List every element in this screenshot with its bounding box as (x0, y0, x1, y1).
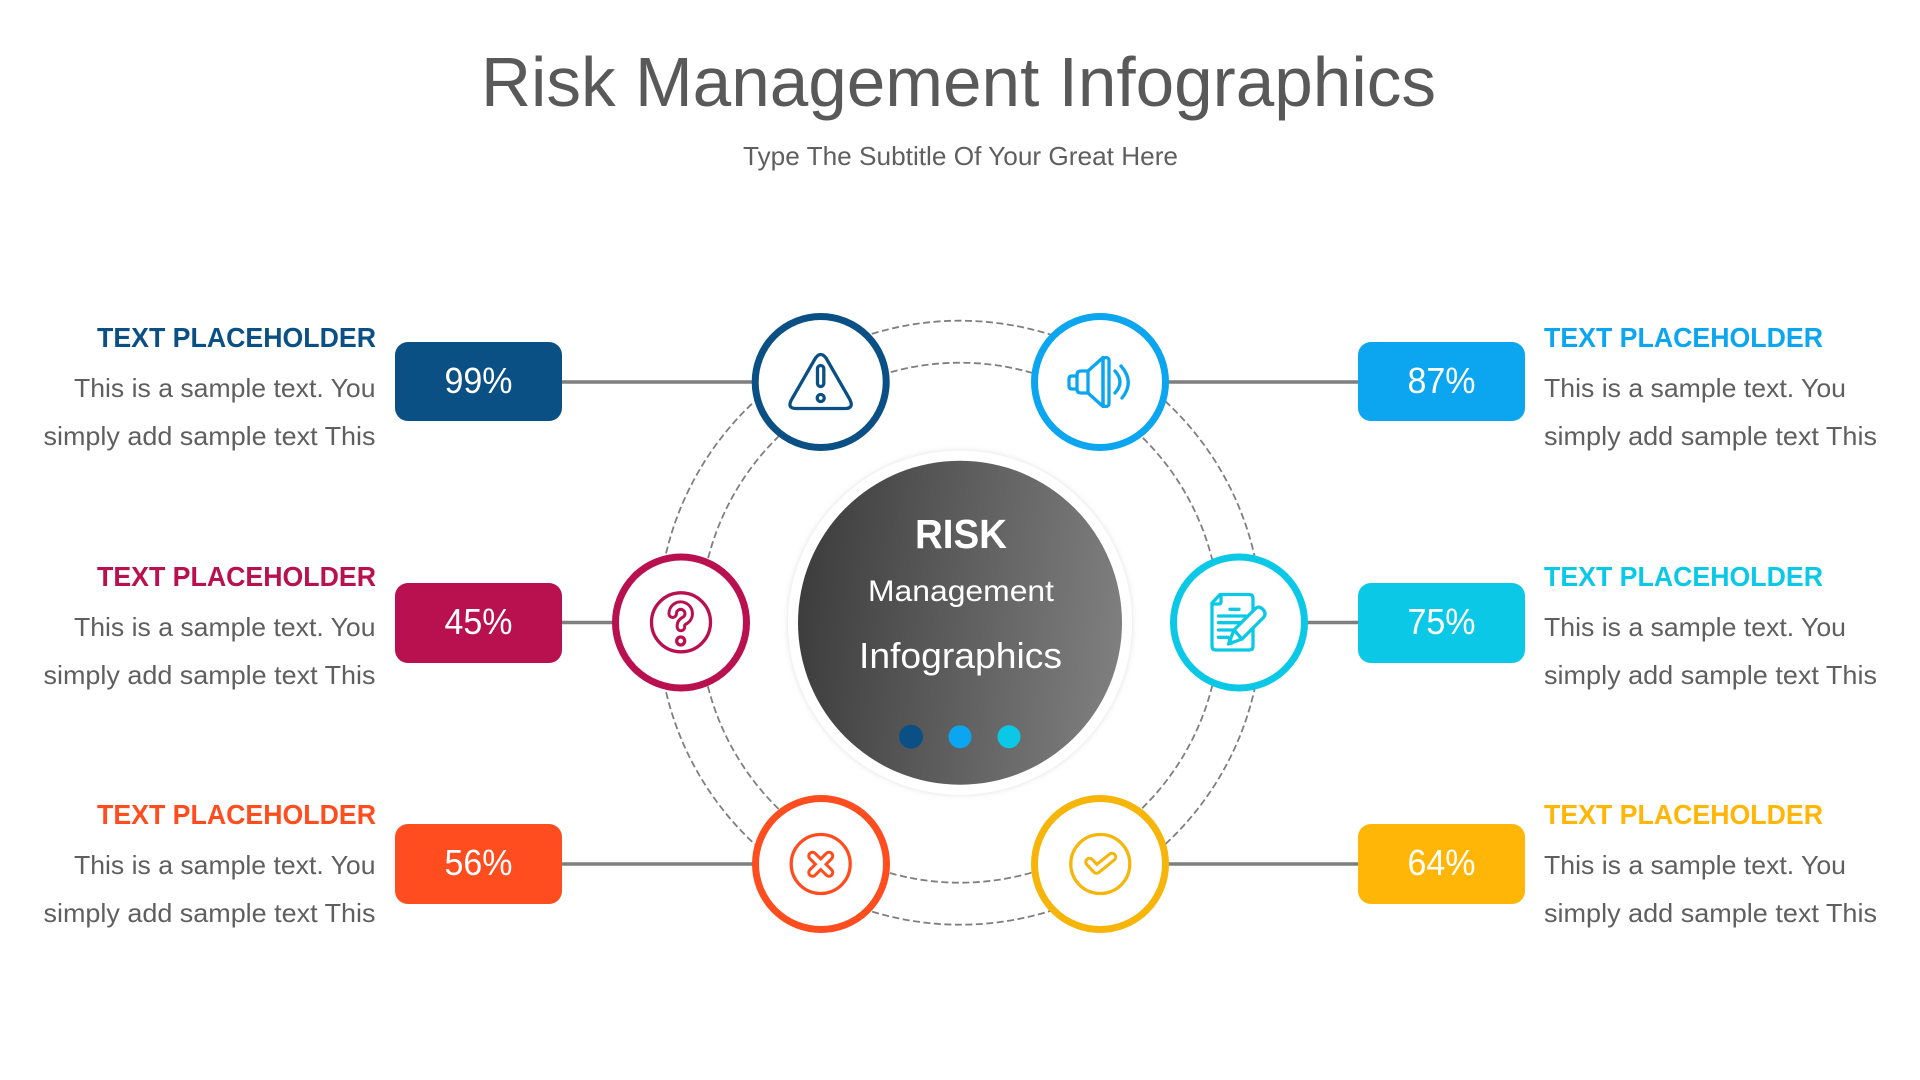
body text: simply add sample text This (44, 660, 376, 690)
hub dots (899, 725, 1020, 749)
body text (44, 612, 376, 690)
body text (1544, 850, 1877, 928)
body text (1544, 373, 1877, 451)
panel: 64% (1358, 799, 1877, 928)
panel: 45% (44, 561, 562, 690)
heading: TEXT PLACEHOLDER (1544, 322, 1823, 353)
panel: 87% (1358, 322, 1877, 451)
panel: 75% (1358, 561, 1877, 690)
value badge (1358, 583, 1525, 663)
heading: TEXT PLACEHOLDER (1544, 799, 1823, 830)
body text: simply add sample text This (1544, 898, 1877, 928)
icon: check in circle (1034, 798, 1166, 930)
value badge: 99% (444, 360, 512, 401)
value badge (395, 342, 562, 421)
value badge: 64% (1408, 842, 1476, 883)
value badge: 87% (1408, 360, 1476, 401)
panel: 99% (44, 322, 562, 451)
hub title: RISK (915, 511, 1007, 557)
body text: This is a sample text. You (1544, 612, 1846, 642)
body text: simply add sample text This (44, 421, 376, 451)
value badge (1358, 342, 1525, 421)
value badge: 75% (1408, 601, 1476, 642)
icon: cross in circle (756, 798, 886, 930)
body text: This is a sample text. You (74, 373, 376, 403)
body text: simply add sample text This (1544, 660, 1877, 690)
connector lines (562, 382, 1358, 864)
center hub (788, 451, 1132, 795)
dashed rings (658, 321, 1262, 925)
body text (1544, 612, 1877, 690)
value badge (395, 824, 562, 904)
value badge (395, 583, 562, 663)
body text (44, 850, 376, 928)
icon: warning triangle (755, 316, 886, 448)
body text (44, 373, 376, 451)
heading: TEXT PLACEHOLDER (97, 799, 376, 830)
body text: This is a sample text. You (1544, 850, 1846, 880)
body text: This is a sample text. You (74, 850, 376, 880)
body text: This is a sample text. You (1544, 373, 1846, 403)
hub line: infographics: Infographics (859, 635, 1062, 676)
value badge (1358, 824, 1525, 904)
body text: simply add sample text This (1544, 421, 1877, 451)
icon: speaker (1034, 316, 1166, 448)
body text: simply add sample text This (44, 898, 376, 928)
icon: question mark (616, 557, 746, 688)
hub line: management: Management (868, 575, 1055, 608)
panel: 56% (44, 799, 562, 928)
body text: This is a sample text. You (74, 612, 376, 642)
value badge: 45% (444, 601, 512, 642)
value badge: 56% (444, 842, 512, 883)
title: Risk Management Infographics (481, 43, 1436, 121)
heading: TEXT PLACEHOLDER (97, 561, 376, 592)
subtitle: Type The Subtitle Of Your Great Here (743, 141, 1178, 171)
icon: document and pencil (1174, 557, 1304, 688)
heading: TEXT PLACEHOLDER (97, 322, 376, 353)
heading: TEXT PLACEHOLDER (1544, 561, 1823, 592)
